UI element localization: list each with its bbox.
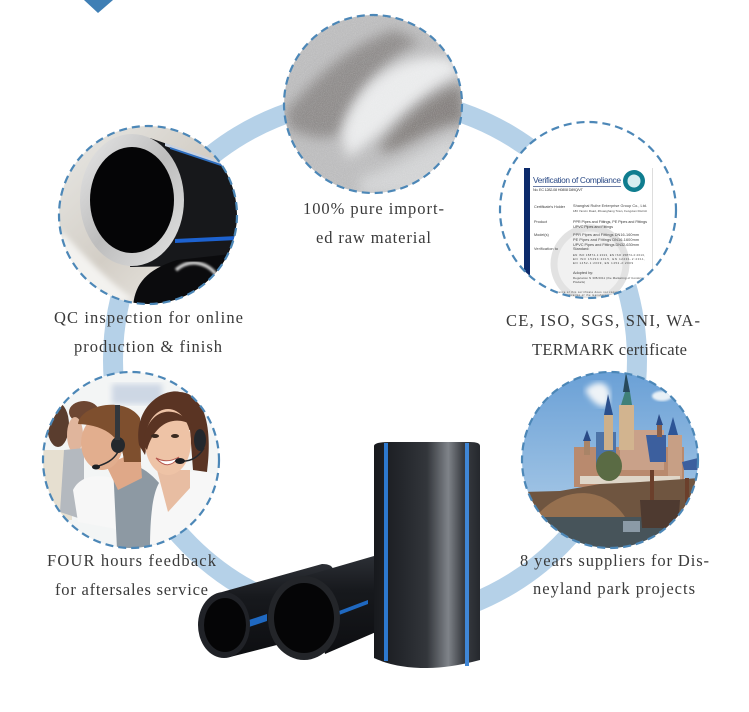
dashed border (59, 126, 237, 304)
photo: white granules (284, 15, 465, 195)
photo: verification of compliance: Standard: (573, 247, 589, 251)
panel: Disneyland projects (521, 371, 699, 549)
caption: certificates: TERMARK certificate (532, 340, 687, 359)
photo: verification of compliance: PPR Pipes and Fittings, PE Pipes and Fittings (573, 220, 647, 224)
caption: QC inspection: production & finish (74, 337, 223, 356)
photo: verification of compliance: Regulation N 305/2011 (the Marketing of Construction (573, 276, 649, 280)
background colleagues (47, 403, 69, 447)
photo: verification of compliance: Issuance of this certificate does not constitute (552, 290, 625, 294)
dashed border (284, 15, 462, 193)
dashed border (522, 372, 698, 548)
photo: verification of compliance: Product (534, 220, 548, 224)
photo: pipe end (59, 126, 240, 310)
water (544, 517, 677, 548)
watermark seal (554, 228, 626, 300)
product photo: HDPE pipes (198, 442, 480, 668)
panel: certificate (500, 122, 676, 300)
photo: verification of compliance: Model(s) (534, 233, 550, 237)
corner marker triangle (84, 0, 113, 13)
panel: QC inspection (59, 126, 240, 310)
photo: verification of compliance: Verification to (534, 247, 558, 251)
photo: verification of compliance: Adopted by: (573, 271, 593, 275)
background ring (113, 98, 637, 622)
middle pipe (268, 556, 376, 660)
photo: verification of compliance: Shanghai Ruihe Enterprise Group Co., Ltd. (573, 204, 647, 208)
caption: suppliers: 8 years suppliers for Dis- (520, 551, 709, 570)
dashed border (500, 122, 676, 298)
caption: suppliers: neyland park projects (533, 579, 695, 598)
towers (619, 405, 634, 450)
photo: verification of compliance: EN 1452-1:2009, EN 1452-2:2009 (573, 261, 633, 265)
photo: verification of compliance: PE Pipes and Fittings DN16-1600mm (573, 238, 639, 242)
dashed border (43, 372, 219, 548)
woman (150, 483, 180, 546)
caption: QC inspection: QC inspection for online (54, 308, 243, 327)
rocks (528, 478, 696, 519)
panel: raw material (284, 15, 465, 195)
photo: castle (521, 371, 699, 549)
caption: feedback: FOUR hours feedback (47, 551, 217, 570)
photo: verification of compliance: EN ISO 15494:2015, EN 12201-2:2011, (573, 257, 645, 261)
panel: customer service (42, 371, 225, 549)
photo: verification of compliance: Verification of Compliance (533, 175, 621, 185)
caption: feedback: for aftersales service (55, 580, 208, 599)
photo: verification of compliance: 180 Yanxin Road, Zhuanghang Town, Fengxian District (573, 209, 647, 213)
man (114, 468, 159, 548)
photo: call centre team (42, 371, 225, 549)
photo: verification of compliance: EN ISO 15874-1:2013, EN ISO 15874-2:2013, (573, 253, 645, 257)
photo: verification of compliance: No. EC 1282-08 H0808 D89Q/VT (533, 188, 584, 192)
photo: verification of compliance: PPR Pipes and Fittings DN16-160mm (573, 233, 639, 237)
photo: verification of compliance (520, 140, 653, 298)
photo: verification of compliance: Products) (573, 280, 585, 284)
photo: verification of compliance: UPVC Pipes and Fittings DN32-630mm (573, 243, 639, 247)
caption: certificates: CE, ISO, SGS, SNI, WA- (506, 311, 700, 330)
large pipe (374, 442, 480, 668)
caption: raw material: ed raw material (316, 228, 431, 247)
small pipe (198, 564, 335, 658)
photo: verification of compliance: Certificate's Holder (534, 205, 566, 209)
photo: verification of compliance: certification of the manufacturer (562, 293, 612, 297)
photo: verification of compliance: UPVC Pipes and Fittings (573, 225, 613, 229)
caption: raw material: 100% pure import- (303, 199, 444, 218)
castle walls (574, 447, 684, 487)
